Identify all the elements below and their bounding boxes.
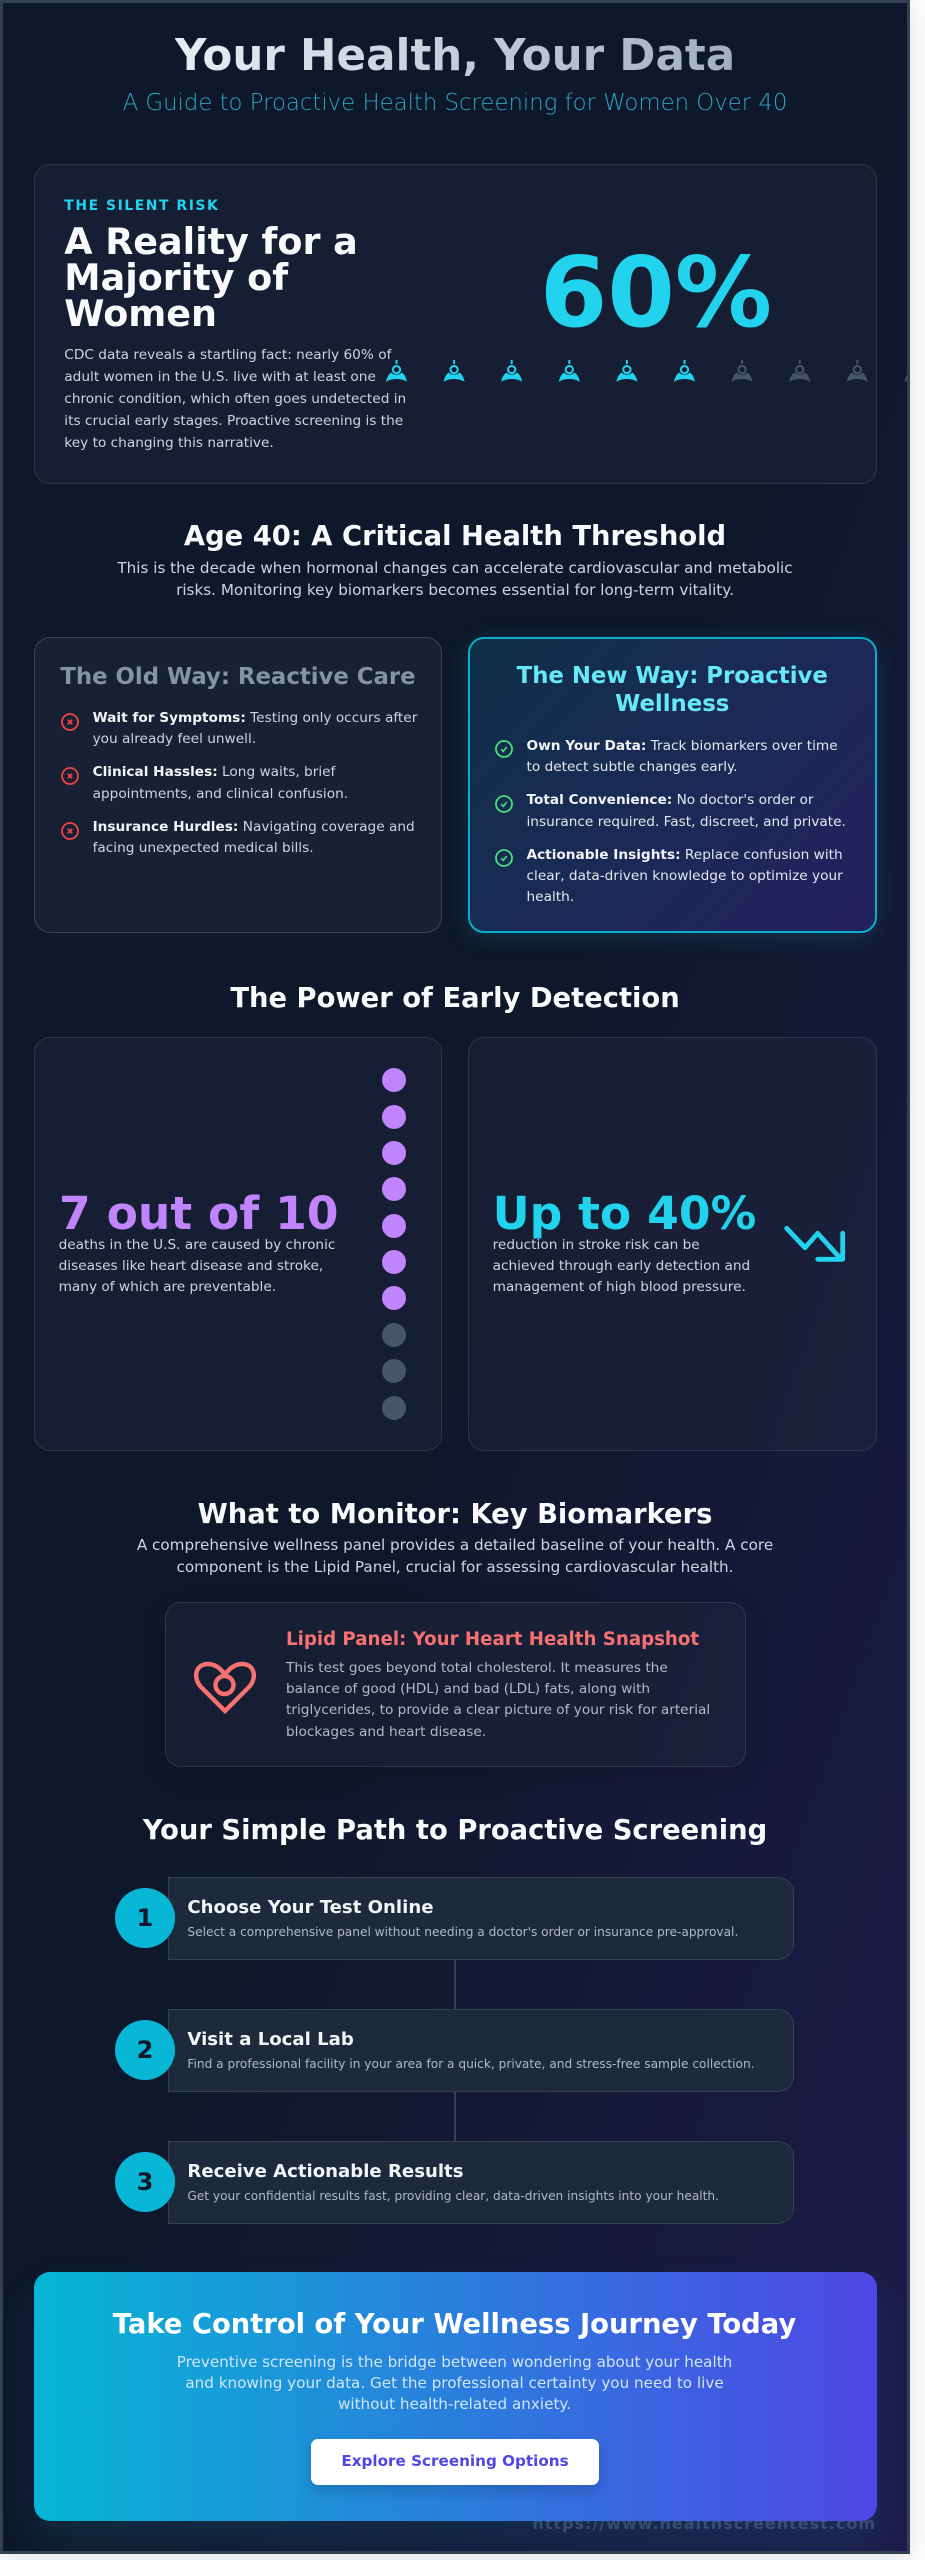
- lipid description: triglycerides, to provide a clear picture of your risk for arterial: [286, 1702, 710, 1718]
- body text: key to changing this narrative.: [64, 435, 274, 451]
- step title: Choose Your Test Online: [187, 1897, 433, 1918]
- lipid description: This test goes beyond total cholesterol. It measures the: [286, 1660, 668, 1676]
- panel heading: [64, 220, 358, 334]
- step title: Receive Actionable Results: [187, 2161, 463, 2182]
- step card: [168, 1877, 794, 1960]
- item: own your data: Own Your Data: Track biomarkers over time: [526, 738, 838, 754]
- step 3: [115, 2141, 794, 2224]
- stat description: achieved through early detection and: [493, 1258, 750, 1274]
- cta heading: Take Control of Your Wellness Journey Today: [113, 2309, 796, 2340]
- item: insurance hurdles: [61, 819, 415, 856]
- stat description: reduction in stroke risk can be: [493, 1237, 700, 1253]
- panel heading: Majority of: [64, 256, 288, 298]
- big stat: 60%: 60%: [540, 236, 772, 349]
- body text: its crucial early stages. Proactive screening is the: [64, 413, 403, 429]
- stat description: deaths in the U.S. are caused by chronic: [59, 1237, 335, 1253]
- source url watermark: https://www.healthscreentest.com: [532, 2514, 876, 2533]
- biomarkers description: A comprehensive wellness panel provides a detailed baseline of your health. A core: [137, 1536, 773, 1554]
- item: insurance hurdles: Insurance Hurdles: Navigating coverage and: [93, 819, 415, 835]
- biomarkers description: component is the Lipid Panel, crucial for assessing cardiovascular health.: [176, 1558, 734, 1576]
- threshold description: [117, 559, 793, 599]
- cta button: [311, 2439, 599, 2485]
- lipid description: blockages and heart disease.: [286, 1724, 486, 1740]
- cta description: [177, 2353, 732, 2413]
- biomarkers description: [137, 1536, 773, 1576]
- connector line: step 2 to 3: [454, 2092, 456, 2141]
- item: wait for symptoms: [61, 710, 418, 747]
- body text: [64, 347, 406, 451]
- step description: Find a professional facility in your area for a quick, private, and stress-free sample collection.: [187, 2057, 755, 2071]
- title: Your Health, Your Data: [175, 31, 735, 81]
- stat value: Up to 40%: [493, 1186, 756, 1240]
- item: actionable insights: clear, data-driven knowledge to optimize your: [526, 868, 843, 884]
- step title: Visit a Local Lab: [187, 2029, 354, 2050]
- panel: call to action: [34, 2272, 876, 2521]
- eyebrow label: THE SILENT RISK: [64, 198, 219, 214]
- step number: 1: [137, 1904, 153, 1932]
- stat description: [59, 1237, 335, 1295]
- step number: [115, 1888, 175, 1948]
- stat description: many of which are preventable.: [59, 1279, 276, 1295]
- lipid heading: Lipid Panel: Your Heart Health Snapshot: [286, 1629, 699, 1650]
- subtitle: A Guide to Proactive Health Screening for Women Over 40: [123, 90, 787, 116]
- step number: 3: [137, 2168, 153, 2196]
- cta description: without health-related anxiety.: [338, 2395, 571, 2413]
- stat description: management of high blood pressure.: [493, 1279, 746, 1295]
- threshold description: risks. Monitoring key biomarkers becomes essential for long-term vitality.: [176, 581, 734, 599]
- step 2: [115, 2009, 794, 2092]
- step description: Get your confidential results fast, providing clear, data-driven insights into your health.: [187, 2189, 719, 2203]
- cta description: Preventive screening is the bridge between wondering about your health: [177, 2353, 732, 2371]
- step description: Select a comprehensive panel without needing a doctor's order or insurance pre-approval.: [187, 1925, 738, 1939]
- item: wait for symptoms: you already feel unwell.: [93, 731, 256, 747]
- item: actionable insights: [495, 847, 843, 905]
- step 1: [115, 1877, 794, 1960]
- heading: simple path: Your Simple Path to Proactive Screening: [143, 1815, 767, 1846]
- panel: lipid panel: [164, 1602, 746, 1767]
- cta button: Explore Screening Options: [341, 2452, 569, 2470]
- icon: trending down arrow: [784, 1226, 846, 1262]
- step number: [115, 2020, 175, 2080]
- panel: up to 40% stat: [468, 1037, 876, 1451]
- lipid description: balance of good (HDL) and bad (LDL) fats, along with: [286, 1681, 650, 1697]
- body text: chronic condition, which often goes undetected in: [64, 391, 406, 407]
- stat value: 7 out of 10: [59, 1186, 339, 1240]
- stat description: [493, 1237, 750, 1295]
- old way heading: The Old Way: Reactive Care: [60, 664, 416, 690]
- icon: heart with ring: [194, 1662, 256, 1714]
- heading: early detection: The Power of Early Detection: [230, 983, 680, 1014]
- stat description: diseases like heart disease and stroke,: [59, 1258, 323, 1274]
- connector line: step 1 to 2: [454, 1960, 456, 2009]
- item: clinical hassles: Clinical Hassles: Long waits, brief: [93, 764, 335, 780]
- heading: key biomarkers: What to Monitor: Key Biomarkers: [198, 1499, 712, 1530]
- item: total convenience: insurance required. Fast, discreet, and private.: [526, 814, 846, 830]
- new way heading: Wellness: [615, 691, 729, 717]
- cta description: and knowing your data. Get the professional certainty you need to live: [185, 2374, 724, 2392]
- heading: critical threshold: Age 40: A Critical Health Threshold: [184, 520, 726, 552]
- panel: the silent risk: [34, 164, 876, 484]
- new way heading: The New Way: Proactive: [517, 663, 828, 689]
- panel: the new way: [468, 637, 876, 933]
- step card: [168, 2141, 794, 2224]
- step number: [115, 2152, 175, 2212]
- item: actionable insights: Actionable Insights: Replace confusion with: [526, 847, 843, 863]
- panel heading: A Reality for a: [64, 220, 358, 262]
- panel: 7 out of 10 stat: [34, 1037, 442, 1451]
- threshold description: This is the decade when hormonal changes can accelerate cardiovascular and metabolic: [117, 559, 793, 577]
- item: total convenience: [495, 792, 846, 830]
- item: total convenience: Total Convenience: No doctor's order or: [526, 792, 813, 808]
- item: own your data: to detect subtle changes early.: [526, 759, 738, 775]
- item: insurance hurdles: facing unexpected medical bills.: [93, 840, 314, 856]
- panel heading: Women: [64, 292, 217, 334]
- panel: the old way: [34, 637, 442, 933]
- new way heading: [516, 663, 828, 717]
- step card: [168, 2009, 794, 2092]
- lipid description: [286, 1660, 710, 1740]
- body text: adult women in the U.S. live with at least one: [64, 369, 376, 385]
- body text: CDC data reveals a startling fact: nearly 60% of: [64, 347, 391, 363]
- item: clinical hassles: appointments, and clinical confusion.: [93, 786, 348, 802]
- item: wait for symptoms: Wait for Symptoms: Testing only occurs after: [93, 710, 417, 726]
- item: clinical hassles: [61, 764, 348, 802]
- icon row: 6 of 10 women highlighted: [386, 360, 907, 382]
- item: own your data: [495, 738, 838, 775]
- item: actionable insights: health.: [526, 889, 574, 905]
- dot chart: 7 of 10: [382, 1068, 406, 1420]
- step number: 2: [137, 2036, 153, 2064]
